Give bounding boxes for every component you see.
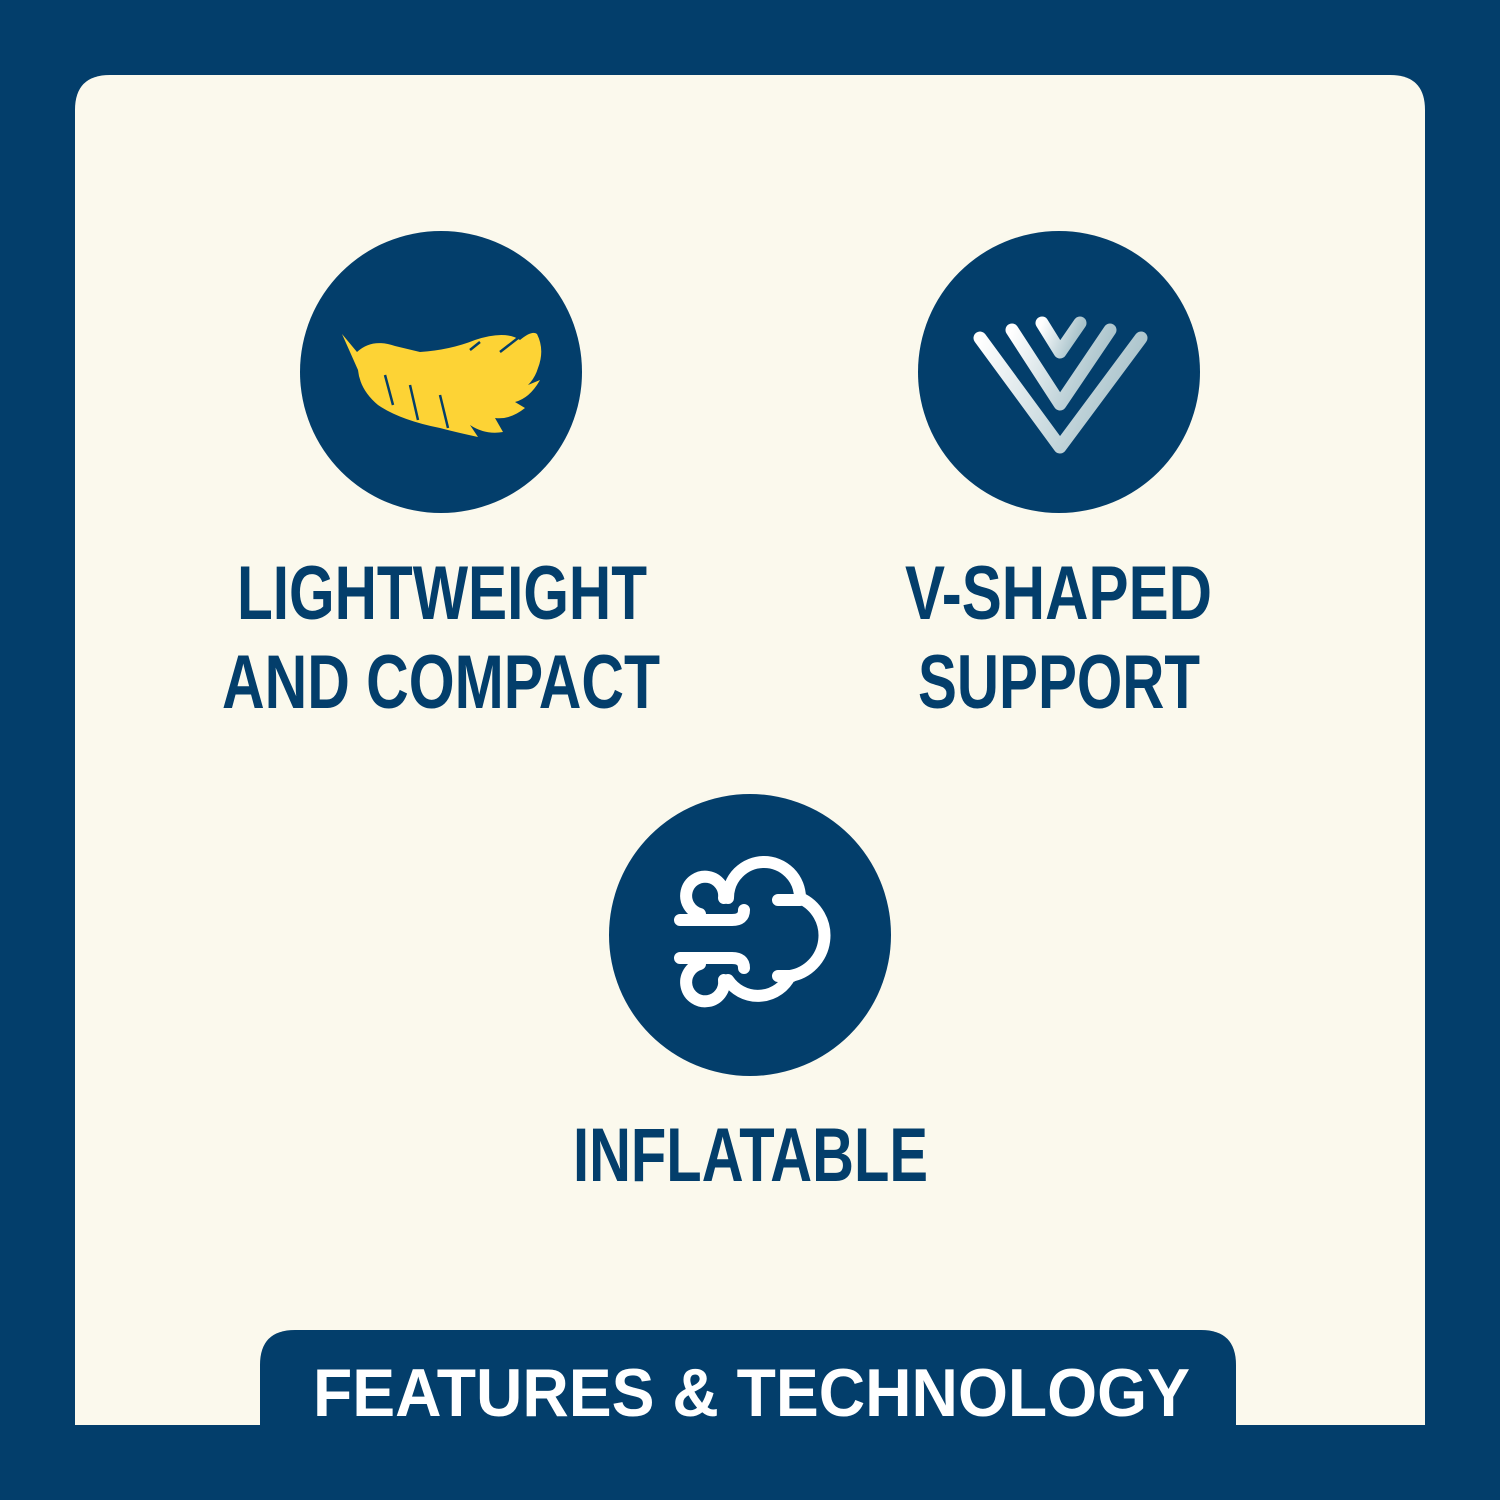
heading: v-shaped support: V-SHAPED [905,551,1212,636]
icon: feather circle [300,231,582,513]
heading: lightweight and compact: LIGHTWEIGHT [237,551,647,636]
heading: lightweight and compact [222,551,660,725]
footer title: FEATURES & TECHNOLOGY [313,1355,1190,1431]
icon: V-shaped support circle [918,231,1200,513]
heading: v-shaped support: SUPPORT [918,640,1200,725]
heading: lightweight and compact: AND COMPACT [222,640,660,725]
heading: v-shaped support [905,551,1212,725]
footer tab [260,1330,1236,1431]
heading: inflatable: INFLATABLE [573,1113,928,1198]
icon: inflatable cloud circle [609,794,891,1076]
